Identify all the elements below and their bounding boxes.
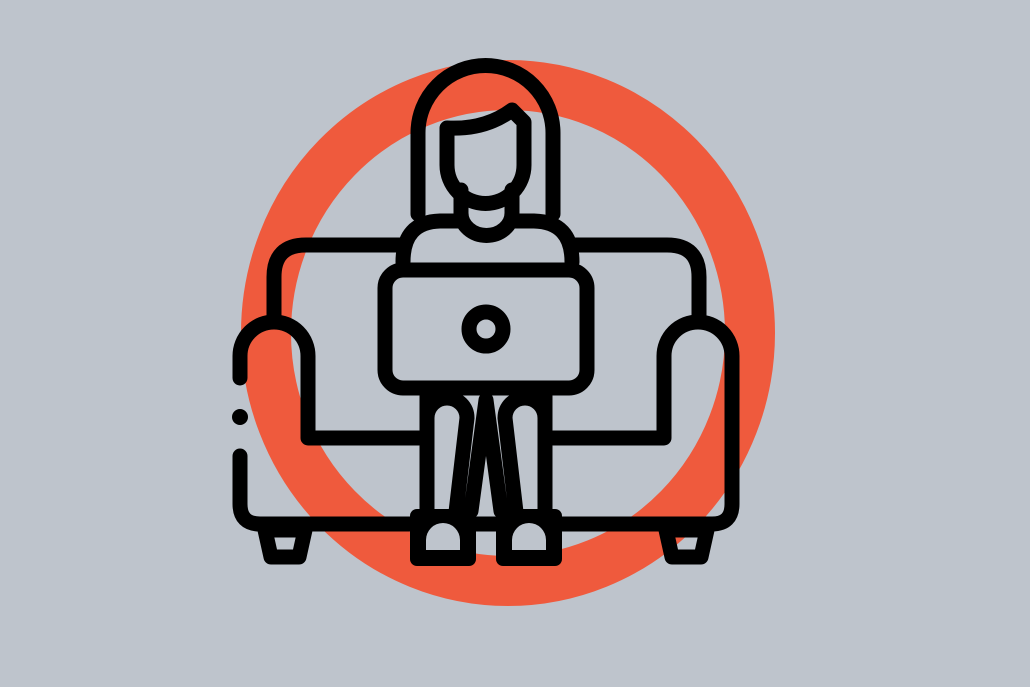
left side dot: [232, 409, 248, 425]
sofa back: [274, 245, 699, 315]
neck: [461, 190, 512, 235]
hair arch: [418, 65, 553, 214]
sofa legs: [265, 530, 707, 557]
laptop: [385, 270, 587, 388]
shoulders: [403, 221, 572, 262]
orange ring: [266, 85, 750, 581]
feet: [410, 509, 562, 566]
left armrest and seat: [240, 322, 419, 438]
person legs: [427, 396, 545, 512]
face: [447, 110, 524, 204]
icon: sofa and person: [240, 65, 732, 557]
laptop logo: [469, 312, 503, 346]
right armrest and seat: [240, 322, 732, 524]
